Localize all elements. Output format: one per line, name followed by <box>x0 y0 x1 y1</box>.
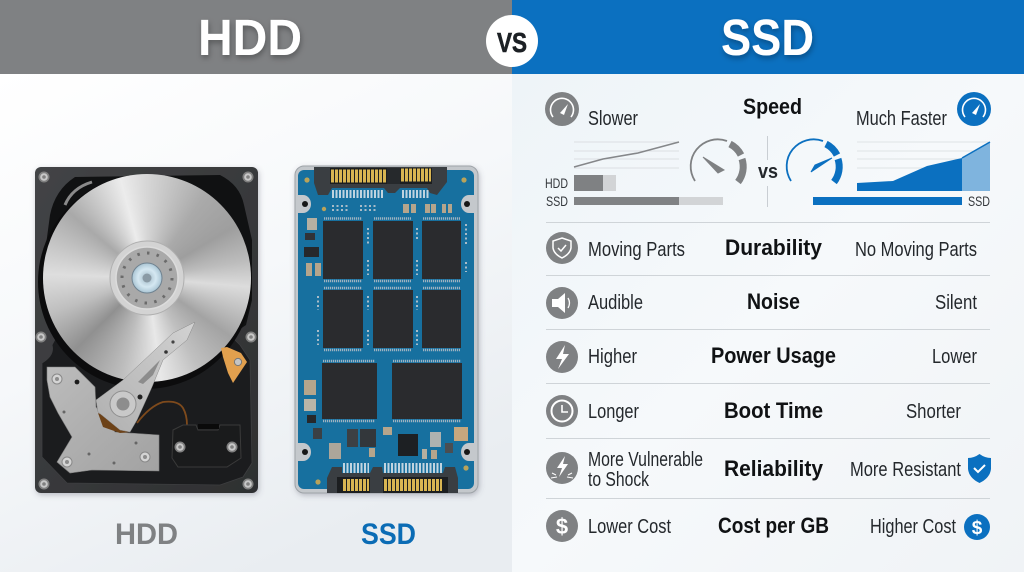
hdd lower cavity <box>42 330 252 485</box>
heading: SSD: SSD <box>721 9 814 66</box>
text: Higher Cost: Higher Cost <box>870 516 956 538</box>
flash chips <box>322 221 462 419</box>
icon: dollar blue <box>964 514 990 540</box>
header: HDD side <box>0 0 512 74</box>
label: HDD: HDD <box>115 518 178 551</box>
magnet plate <box>47 367 159 473</box>
text: No Moving Parts: No Moving Parts <box>855 239 977 261</box>
header: SSD side <box>512 0 1024 74</box>
bar: SSD: SSD <box>968 193 990 209</box>
small components left <box>304 218 321 423</box>
vs badge <box>486 15 538 67</box>
row: Cost per GB <box>546 510 990 542</box>
bars: SSD <box>546 193 723 209</box>
plate screws <box>52 374 150 467</box>
center divider <box>766 136 768 207</box>
icon: lightning bolt <box>546 341 578 373</box>
heading: Reliability: Reliability <box>724 456 824 481</box>
bars: HDD: HDD <box>545 175 568 191</box>
bottom connector <box>327 467 458 493</box>
icon: SSD speedometer <box>957 92 991 126</box>
text: vs: vs <box>758 161 778 183</box>
row: Durability <box>546 232 977 264</box>
bars: SSD: SSD <box>546 193 568 209</box>
small components bottom <box>313 427 468 459</box>
background left <box>0 74 512 572</box>
illustration: hard disk drive <box>35 167 258 493</box>
row: Power Usage <box>546 341 977 373</box>
ribbon cable <box>137 402 187 425</box>
icon: shock <box>546 452 578 484</box>
text: Audible: Audible <box>588 292 643 314</box>
actuator arm <box>96 322 195 432</box>
text: Slower: Slower <box>588 108 638 130</box>
under-arm flex <box>98 413 130 433</box>
chart: SSD area <box>857 142 990 191</box>
text: Longer: Longer <box>588 401 639 423</box>
heading: Speed: Speed <box>743 94 802 119</box>
text: Moving Parts: Moving Parts <box>588 239 685 261</box>
label: SSD: SSD <box>361 518 416 551</box>
hdd upper cavity <box>44 175 252 390</box>
row: Noise <box>546 287 977 319</box>
chart: HDD line <box>574 142 679 168</box>
icon: dollar grey <box>546 510 578 542</box>
bars: HDD <box>545 175 616 191</box>
text: Much Faster: Much Faster <box>856 108 947 130</box>
heading: Noise: Noise <box>747 289 800 314</box>
gold vias <box>304 177 469 485</box>
small components top <box>403 204 452 213</box>
text: to Shock: to Shock <box>588 469 650 491</box>
top connector <box>314 167 447 195</box>
text: Lower Cost: Lower Cost <box>588 516 671 538</box>
gauge: HDD <box>691 139 743 182</box>
gauge: SSD <box>787 139 839 182</box>
mounting holes <box>302 201 470 455</box>
small rail detail <box>65 182 92 205</box>
hdd case <box>35 167 258 493</box>
background right <box>512 74 1024 572</box>
header bar <box>0 0 1024 74</box>
text: Higher: Higher <box>588 346 637 368</box>
platter <box>43 174 251 382</box>
board dots <box>318 206 466 345</box>
text: More Resistant: More Resistant <box>850 459 961 481</box>
bar: SSD <box>813 193 990 209</box>
icon: speaker <box>546 287 578 319</box>
illustration: solid state drive <box>295 166 478 493</box>
hdd screws <box>36 172 256 490</box>
connector housing <box>172 424 241 467</box>
text: Lower: Lower <box>932 346 977 368</box>
icon: blue shield <box>968 454 991 483</box>
text: Silent: Silent <box>935 292 977 314</box>
heading: Boot Time: Boot Time <box>724 398 823 423</box>
text: More Vulnerable: More Vulnerable <box>588 449 703 471</box>
row: Reliability <box>546 449 991 491</box>
heading: Durability: Durability <box>725 235 823 260</box>
icon: dollar grey: $ <box>556 514 568 539</box>
text: Shorter: Shorter <box>906 401 961 423</box>
mounting corners <box>298 195 474 461</box>
orange latch <box>221 347 247 383</box>
platter shadow <box>38 175 252 389</box>
icon: shield <box>546 232 578 264</box>
icon: clock <box>546 395 578 427</box>
row: Boot Time <box>546 395 961 427</box>
platter hub <box>110 241 184 315</box>
heading: Cost per GB: Cost per GB <box>718 513 829 538</box>
heading: Power Usage: Power Usage <box>711 343 836 368</box>
heading: HDD: HDD <box>198 9 302 66</box>
row: Speed <box>545 92 991 209</box>
ssd frame <box>295 166 478 493</box>
icon: dollar blue: $ <box>972 518 983 539</box>
ssd pcb <box>298 170 474 489</box>
vs badge: VS <box>497 27 527 58</box>
chip pins <box>323 218 461 421</box>
icon: HDD speedometer <box>545 92 579 126</box>
